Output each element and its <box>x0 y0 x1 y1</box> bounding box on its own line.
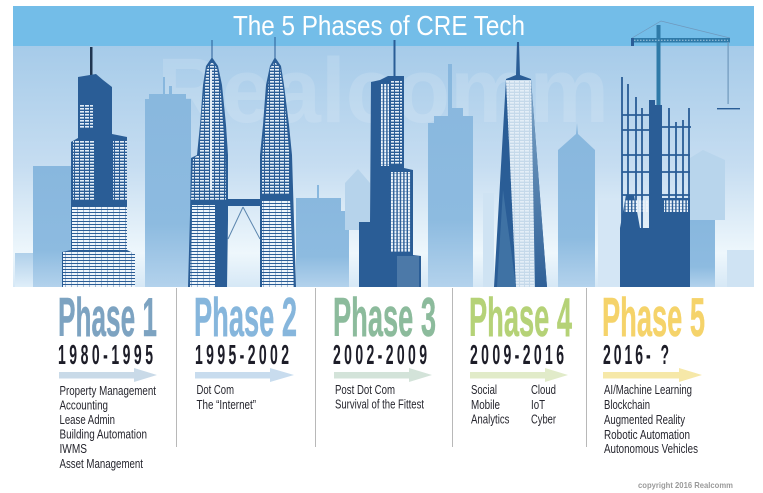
list: phase 1 <box>60 384 156 471</box>
arrow: phase 3 <box>334 368 432 382</box>
skyline illustration <box>13 6 754 287</box>
title: The 5 Phases of CRE Tech <box>233 10 525 41</box>
steel frame <box>622 77 691 228</box>
divider lines <box>176 288 586 447</box>
dates: phase 5: 2016- ? <box>603 339 669 370</box>
panel: phase 5 <box>602 286 705 456</box>
list: phase 5: Blockchain <box>604 398 650 412</box>
infographic canvas: Phase 4 <box>469 286 572 348</box>
tower: phase 1 <box>62 47 135 287</box>
list: phase 1: Asset Management <box>60 457 143 471</box>
crane <box>631 21 740 109</box>
infographic canvas: Phase 3 <box>333 286 436 348</box>
arrow: phase 4 <box>470 368 568 382</box>
list: phase 1: Property Management <box>60 384 156 398</box>
infographic canvas: Phase 1 <box>58 286 157 348</box>
tower: phase 5 with crane <box>620 21 740 287</box>
list: phase 4: Cloud <box>531 383 556 397</box>
infographic canvas: Phase 2 <box>194 286 297 348</box>
arrow: phase 5 <box>603 368 702 382</box>
list: phase 4 <box>471 383 556 426</box>
sky background <box>13 46 754 287</box>
list: phase 2: The “Internet” <box>196 398 256 412</box>
dates: phase 2: 1995-2002 <box>195 339 289 370</box>
list: phase 4: IoT <box>531 398 545 412</box>
list: phase 5: Augmented Reality <box>604 413 686 427</box>
panel: phase 3 <box>333 286 436 412</box>
list: phase 4: Cyber <box>531 412 556 426</box>
list: phase 4: Analytics <box>471 412 510 426</box>
list: phase 5: Robotic Automation <box>604 428 690 442</box>
list: phase 1: Lease Admin <box>60 413 115 427</box>
dates: phase 3: 2002-2009 <box>333 339 427 370</box>
copyright: copyright 2016 Realcomm <box>638 480 733 490</box>
list: phase 1: Building Automation <box>60 428 147 442</box>
list: phase 5 <box>604 383 698 456</box>
title band <box>13 6 754 46</box>
list: phase 3: Post Dot Com <box>335 383 395 397</box>
panel: phase 1 <box>58 286 157 471</box>
list: phase 3: Survival of the Fittest <box>335 398 424 412</box>
list: phase 3 <box>335 383 424 412</box>
dates: phase 4: 2009-2016 <box>470 339 564 370</box>
list: phase 4: Social <box>471 383 497 397</box>
watermark: Realcomm <box>157 40 609 142</box>
towers: phase 2 <box>188 37 296 287</box>
list: phase 5: AI/Machine Learning <box>604 383 692 397</box>
dates: phase 1: 1980-1995 <box>58 339 153 370</box>
background buildings <box>15 64 754 287</box>
list: phase 2 <box>196 383 256 412</box>
tower: phase 3 <box>359 40 421 287</box>
list: phase 1: Accounting <box>60 398 108 412</box>
tower: phase 4 <box>494 42 547 287</box>
list: phase 4: Mobile <box>471 398 500 412</box>
panel: phase 4 <box>469 286 572 426</box>
list: phase 1: IWMS <box>60 442 87 456</box>
arrow: phase 2 <box>195 368 294 382</box>
list: phase 5: Autonomous Vehicles <box>604 442 698 456</box>
panel: phase 2 <box>194 286 297 412</box>
list: phase 2: Dot Com <box>196 383 234 397</box>
arrow: phase 1 <box>59 368 157 382</box>
